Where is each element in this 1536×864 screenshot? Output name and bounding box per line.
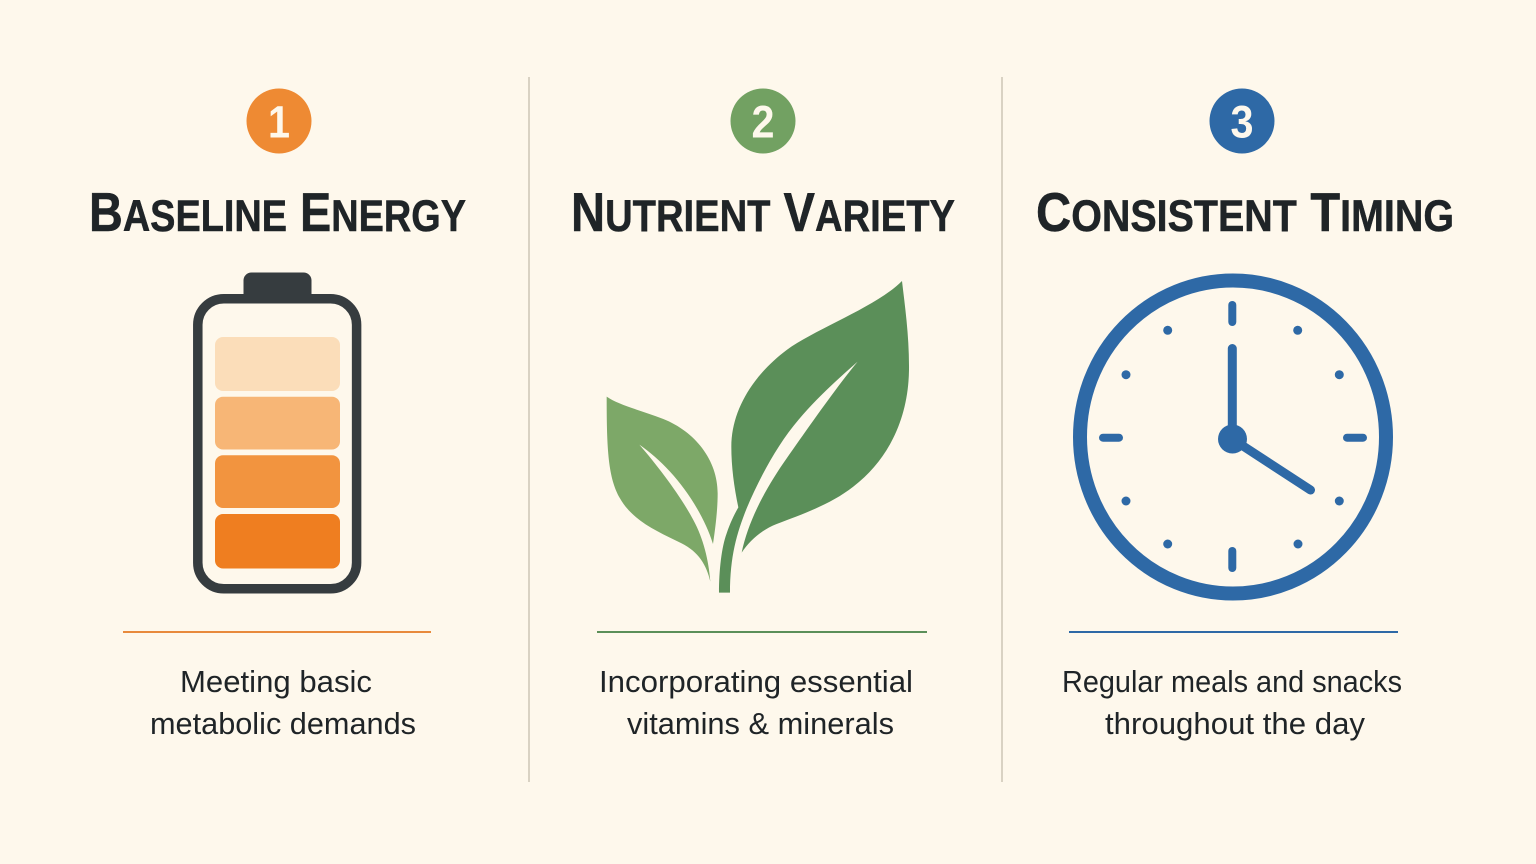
badge: number 2: [730, 88, 796, 154]
description: nutrient variety: vitamins & minerals: [627, 706, 894, 741]
rule: blue: [1069, 631, 1398, 633]
description: baseline energy: Meeting basic: [180, 664, 372, 699]
description: consistent timing: [1062, 664, 1402, 741]
description: baseline energy: metabolic demands: [150, 706, 416, 741]
description: nutrient variety: [599, 664, 913, 741]
badge: number 1: 1: [268, 96, 290, 148]
panel: consistent timing: [1036, 88, 1454, 741]
description: consistent timing: throughout the day: [1105, 706, 1365, 741]
icon: clock: [1080, 280, 1386, 594]
badge: number 2: 2: [752, 96, 774, 148]
rule: orange: [123, 631, 431, 633]
description: nutrient variety: Incorporating essential: [599, 664, 913, 699]
badge: number 1: [246, 88, 312, 154]
rule: green: [597, 631, 927, 633]
icon: battery: [198, 272, 357, 589]
heading: baseline energy: BASELINE ENERGY: [89, 181, 466, 243]
badge: number 3: [1210, 88, 1274, 154]
description: consistent timing: Regular meals and snacks: [1062, 664, 1402, 699]
description: baseline energy: [150, 664, 416, 741]
badge: number 3: 3: [1230, 96, 1254, 148]
heading: consistent timing: CONSISTENT TIMING: [1036, 181, 1454, 243]
panel: baseline energy: [89, 88, 466, 741]
icon: leaves: [607, 281, 909, 593]
heading: nutrient variety: NUTRIENT VARIETY: [571, 181, 955, 243]
panel: nutrient variety: [571, 88, 955, 741]
